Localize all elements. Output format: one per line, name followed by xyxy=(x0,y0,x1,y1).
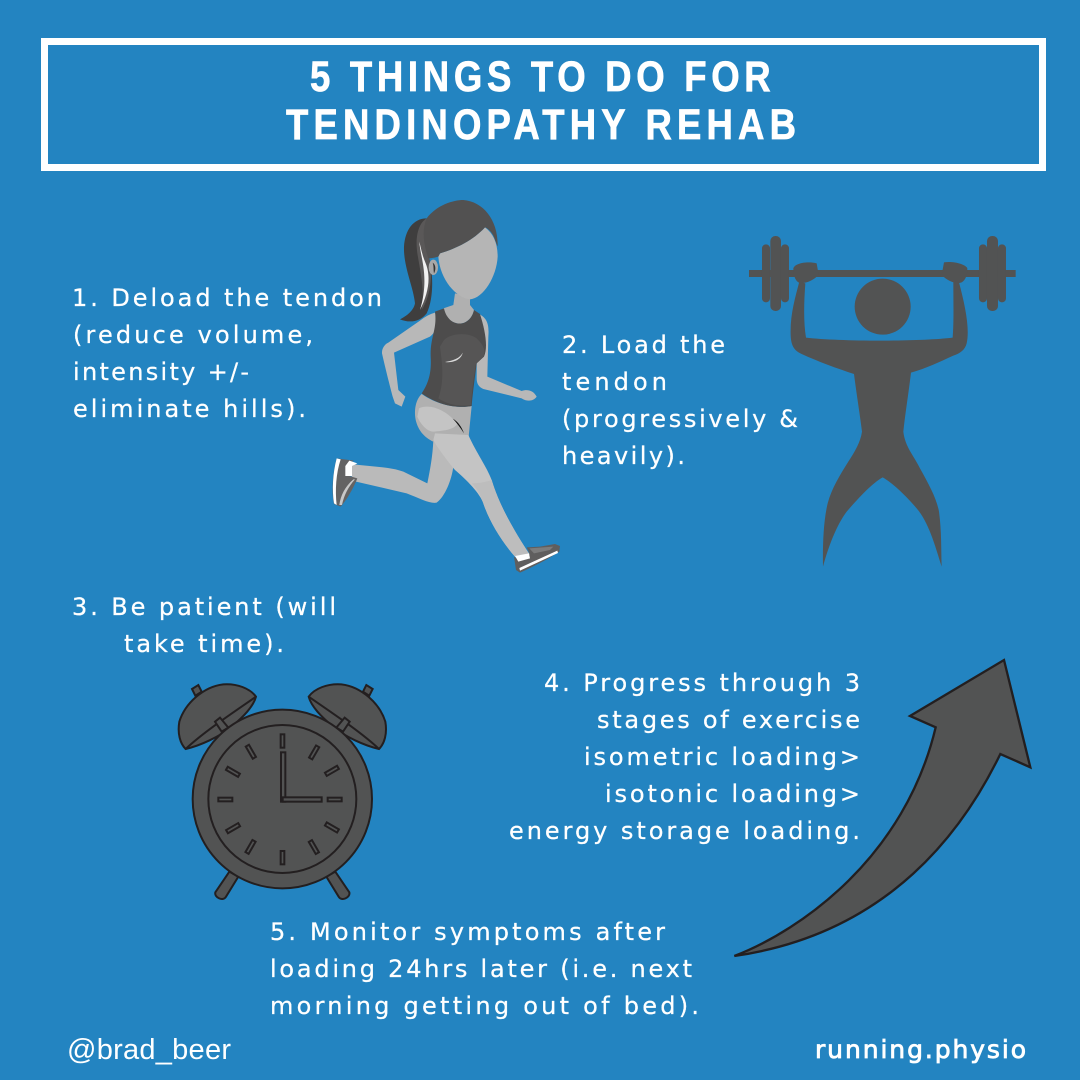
text: step 4: stages of exercise xyxy=(597,706,860,734)
text: step 3: take time). xyxy=(124,630,284,658)
text: step 2 xyxy=(562,331,798,470)
title banner: TENDINOPATHY REHAB xyxy=(286,101,796,149)
icon: weightlifter with barbell xyxy=(749,236,1016,567)
icon: upward curved arrow xyxy=(734,660,1030,956)
text: step 1: (reduce volume, xyxy=(73,321,313,349)
text: step 4: 4. Progress through 3 xyxy=(544,669,860,697)
text: step 4: isometric loading> xyxy=(584,743,860,771)
text: step 1: eliminate hills). xyxy=(73,395,306,423)
icon: alarm clock xyxy=(179,684,386,899)
text: step 5: morning getting out of bed). xyxy=(270,992,699,1020)
text: step 3 xyxy=(72,593,336,658)
text: step 1 xyxy=(72,284,382,423)
title banner xyxy=(44,42,1042,168)
footer: website: running.physio xyxy=(815,1035,1026,1064)
text: step 4 xyxy=(509,669,860,845)
text: step 1: intensity +/- xyxy=(73,358,249,386)
text: step 2: tendon xyxy=(562,368,667,396)
text: step 3: 3. Be patient (will xyxy=(72,593,336,621)
title banner: 5 THINGS TO DO FOR xyxy=(310,53,771,101)
text: step 2: 2. Load the xyxy=(562,331,725,359)
text: step 1: 1. Deload the tendon xyxy=(72,284,382,312)
text: step 2: heavily). xyxy=(562,442,685,470)
text: step 5: loading 24hrs later (i.e. next xyxy=(270,955,692,983)
text: step 4: energy storage loading. xyxy=(509,817,860,845)
text: step 5 xyxy=(270,918,699,1020)
footer: author handle: @brad_beer xyxy=(67,1034,231,1066)
text: step 5: 5. Monitor symptoms after xyxy=(270,918,665,946)
text: step 2: (progressively & xyxy=(562,405,798,433)
text: step 4: isotonic loading> xyxy=(605,780,860,808)
icon: female runner xyxy=(333,200,560,573)
